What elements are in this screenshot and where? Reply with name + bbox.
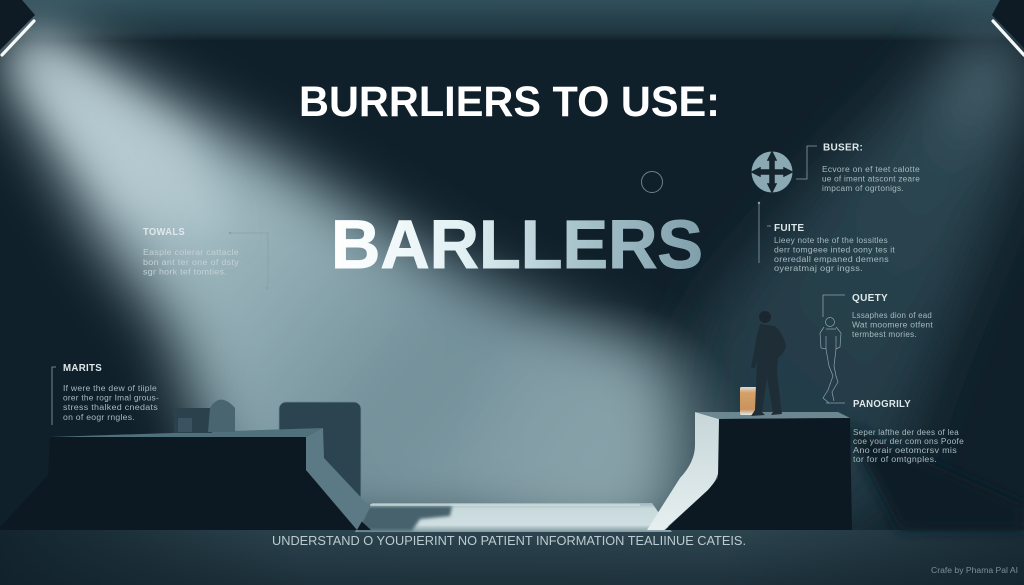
left beam hot core <box>10 34 230 240</box>
left light beam <box>2 30 670 530</box>
callout: Marits: MARITS <box>63 363 102 374</box>
callout: Quety: QUETY <box>852 293 888 304</box>
floor <box>0 530 1024 585</box>
platform top <box>695 412 850 419</box>
callout: Marits: stress thalked cnedats <box>63 403 158 412</box>
right lamp <box>992 0 1024 55</box>
back wall glow <box>450 300 750 530</box>
callout: Fuite: FUITE <box>774 223 804 234</box>
callout: Fuite: oreredall empaned demens <box>774 255 889 264</box>
callout: Quety: Lssaphes dion of ead <box>852 311 932 320</box>
bottom tagline: UNDERSTAND O YOUPIERINT NO PATIENT INFORMATION TEALIINUE CATEIS. <box>272 534 746 548</box>
callout: Panogrily: Ano orair oetomcrsv mis <box>853 446 957 455</box>
right ramp <box>647 412 719 530</box>
left platform <box>0 402 371 530</box>
callout: Fuite: derr tomgeee inted oony tes it <box>774 246 896 254</box>
callout: Marits: If were the dew of tiiple <box>63 384 157 393</box>
callout: Fuite: oyeratmaj ogr ingss. <box>774 264 863 273</box>
callout: Marits <box>52 363 159 425</box>
callout: Panogrily: tor for of omtgnples. <box>853 455 937 464</box>
callout: Tomals <box>143 227 268 289</box>
callout: Tomals: sgr hork tef tomties. <box>143 268 227 276</box>
right platform <box>665 412 852 530</box>
callout: Tomals: bon ant ter one of dsty <box>143 258 239 267</box>
callout: Tomals: Easple colerar cattacle <box>143 248 239 257</box>
can <box>740 387 757 415</box>
main word: BARLLERS <box>331 206 703 283</box>
platform front <box>665 418 852 530</box>
line-drawing figure <box>820 318 841 403</box>
grey ramp <box>306 428 370 530</box>
platform shadow <box>845 425 1024 530</box>
callout: Tomals: TOWALS <box>143 227 185 238</box>
right light beam <box>660 25 1024 530</box>
callout: Buser: impcam of ogrtonigs. <box>822 184 904 193</box>
callout: Fuite <box>758 202 896 273</box>
callout: Marits: on of eogr rngles. <box>63 413 135 422</box>
callout: Panogrily: Seper lafthe der dees of lea <box>853 428 959 437</box>
left lamp <box>0 0 35 55</box>
platform front <box>0 437 371 530</box>
callout: Buser: Ecvore on ef teet calotte <box>822 165 920 174</box>
ceiling band <box>0 0 1024 40</box>
back panel <box>279 402 361 512</box>
callout: Quety: termbest mories. <box>852 330 917 339</box>
callout: Buser: ue of iment atscont zeare <box>822 174 920 184</box>
lit stage and steps <box>355 503 672 532</box>
callout: Buser: BUSER: <box>823 142 863 154</box>
callout: Quety <box>823 293 934 339</box>
person <box>751 311 786 416</box>
callout: Panogrily: coe your der com ons Poofe <box>853 437 964 446</box>
title: BURRLIERS TO USE: <box>299 78 720 126</box>
callout: Panogrily <box>826 399 964 464</box>
platform top <box>50 428 323 437</box>
callout: Marits: orer the rogr Imal grous- <box>63 394 159 402</box>
callout: Quety: Wat moomere otfent <box>852 320 934 330</box>
decorative ring <box>642 172 662 192</box>
icon: cross compass <box>752 152 792 192</box>
callout: Panogrily: PANOGRILY <box>853 399 911 410</box>
callout: Fuite: Lieey note the of the lossitles <box>774 236 888 245</box>
credit: Crafe by Phama Pal AI <box>931 566 1018 575</box>
callout: Buser <box>752 142 920 193</box>
box and bag on left platform <box>174 400 235 433</box>
